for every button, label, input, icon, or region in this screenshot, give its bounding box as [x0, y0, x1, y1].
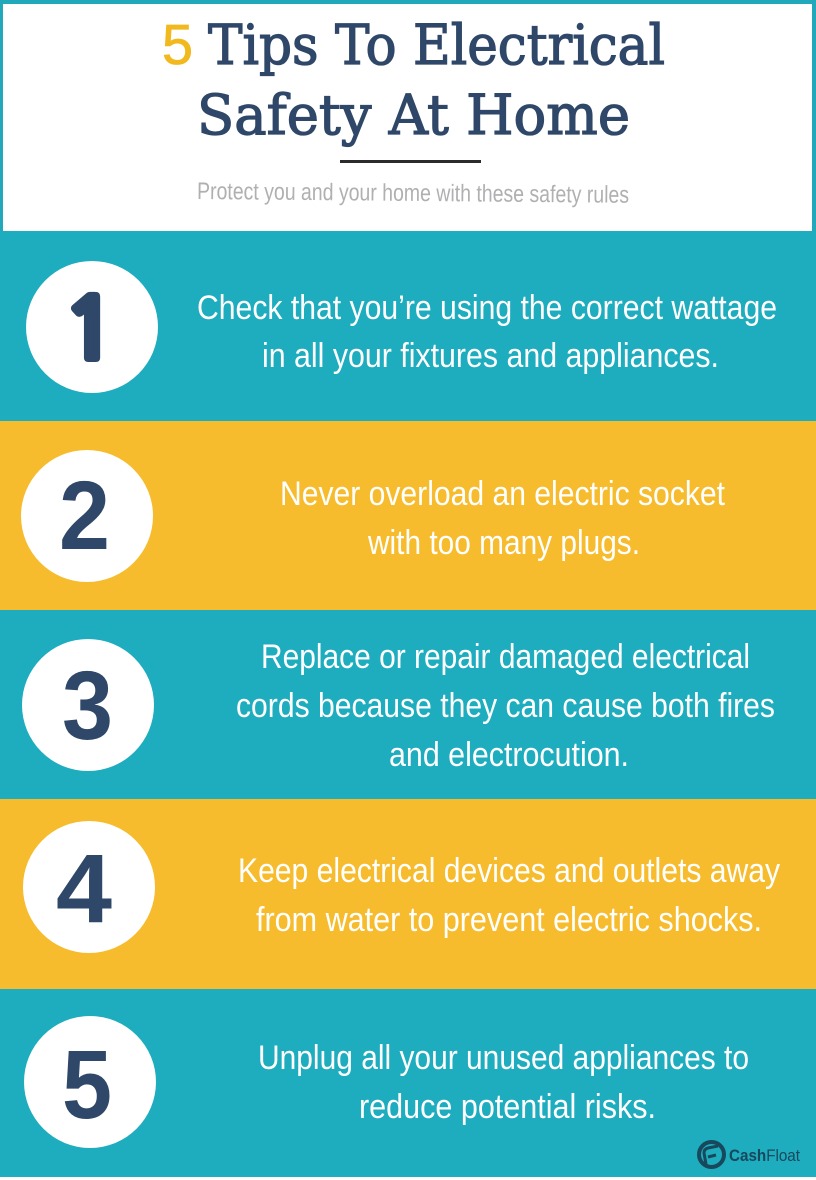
- panel: tip 3: [0, 610, 816, 799]
- tip 3 text: and electrocution.: [389, 736, 629, 774]
- number badge 2: 2: [59, 461, 110, 570]
- panel: tip 1: [0, 231, 816, 421]
- tip 4 text: from water to prevent electric shocks.: [256, 901, 762, 939]
- number badge 5: 5: [62, 1030, 112, 1139]
- number badge 3: [22, 639, 154, 771]
- panel: tip 4: [0, 799, 816, 989]
- number badge 3: 3: [62, 651, 113, 760]
- tip 2 text: [280, 475, 725, 562]
- number badge 1: 1: [62, 288, 118, 372]
- logo: CashFloat: [699, 1142, 800, 1167]
- number badge 4: [23, 821, 155, 953]
- tip 5 text: reduce potential risks.: [359, 1088, 656, 1126]
- tip 5 text: [258, 1039, 749, 1126]
- tip 1 text: in all your fixtures and appliances.: [262, 337, 719, 375]
- title: 5: [162, 13, 193, 77]
- number badge 4: 4: [56, 834, 112, 943]
- tip 2 text: Never overload an electric socket: [280, 475, 725, 513]
- tip 3 text: [236, 638, 775, 774]
- title: Safety At Home: [197, 83, 630, 147]
- number badge 2: [21, 450, 153, 582]
- tip 5 text: Unplug all your unused appliances to: [258, 1039, 749, 1077]
- divider rule: [340, 160, 481, 163]
- tip 4 text: [238, 852, 780, 939]
- panel: header: [0, 0, 816, 232]
- subtitle: Protect you and your home with these safety rules: [197, 178, 629, 209]
- title: [162, 13, 665, 147]
- tip 1 text: [197, 289, 777, 375]
- title: Tips To Electrical: [208, 13, 665, 77]
- panel: tip 5: [0, 989, 816, 1177]
- number badge 1: [26, 261, 158, 393]
- tip 2 text: with too many plugs.: [367, 524, 640, 562]
- panel: tip 2: [0, 421, 816, 610]
- tip 3 text: Replace or repair damaged electrical: [261, 638, 750, 676]
- icon: CashFloat mark: [699, 1142, 724, 1167]
- logo: CashFloat: CashFloat: [729, 1146, 800, 1165]
- number badge 5: [24, 1016, 156, 1148]
